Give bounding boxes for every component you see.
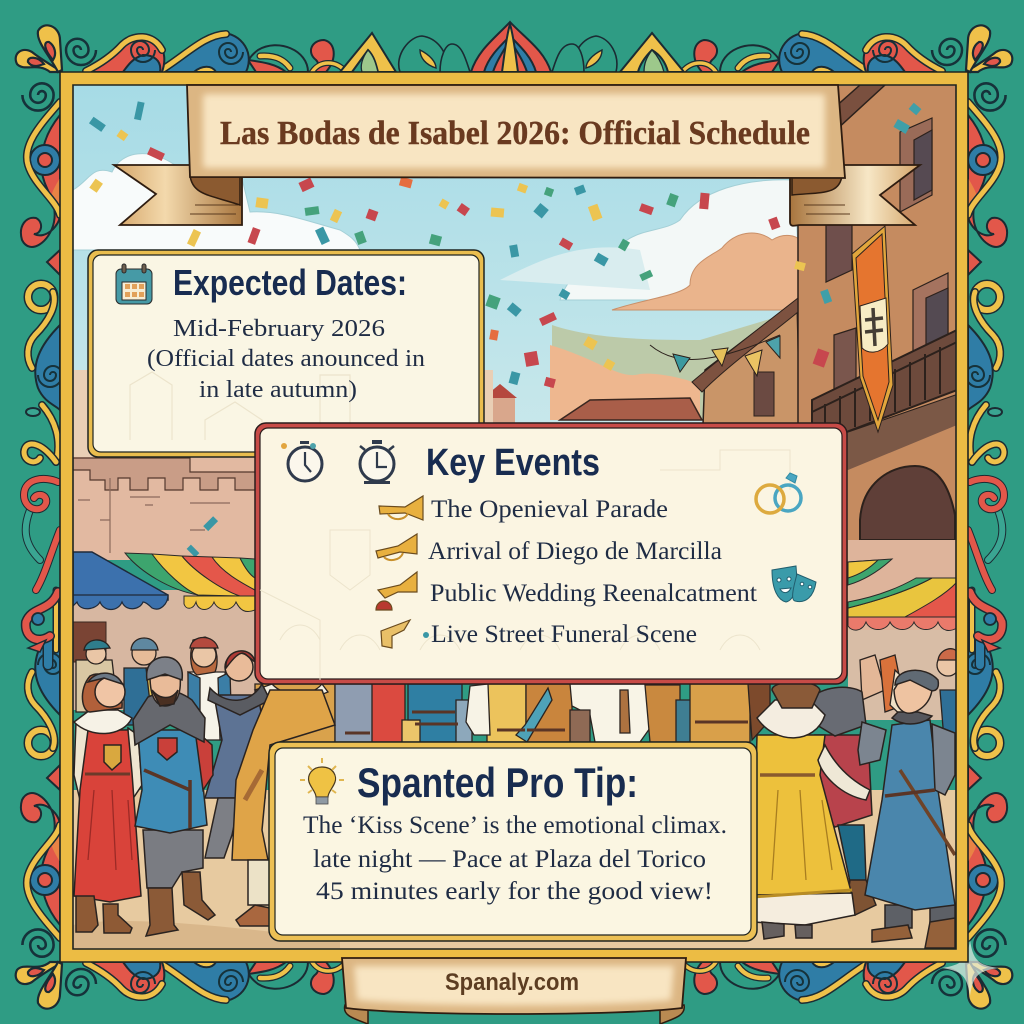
striped tent left [125,553,255,612]
bunting [650,335,780,376]
panel background [88,250,484,457]
arch door [860,466,955,540]
figure: woman in blue dress [858,670,955,948]
teal wall confetti [187,516,218,557]
footer parchment [342,958,686,1014]
lower right wall [848,540,957,640]
text: date details: in late autumn) [199,377,357,403]
panel background [269,742,757,941]
figure: blue-grey man [205,651,270,858]
footer scroll [342,958,686,1024]
sky [73,85,957,505]
heading: key events: Key Events [426,442,600,484]
top centre gem [340,22,684,72]
faint backdrop sketch [260,450,790,680]
stall backdrop [73,590,263,710]
left clouds [73,154,360,250]
icon: trumpet 1 [379,496,423,520]
panel: key events [255,423,847,684]
icon: light bulb [300,758,344,804]
confetti [89,101,921,388]
title scroll [114,85,920,226]
text: event 3: Public Wedding Reenalcatment [430,580,757,607]
left ornament column [21,83,62,957]
parchment banner [187,85,845,178]
title text: Las Bodas de Isabel 2026: Official Schedule [220,115,810,152]
panel: expected dates [88,250,484,457]
panel background [255,423,847,684]
windows [826,118,948,408]
blue tent [73,552,168,600]
left pale town [73,370,493,465]
footer tails [344,1005,684,1024]
icon: stopwatch [360,440,394,484]
sparkle [942,940,998,996]
icon: trumpet 2 [376,534,417,560]
text: date details [147,316,425,403]
event list [376,496,757,648]
text: date details: (Official dates anounced in [147,346,425,372]
figure: woman in yellow dress [753,682,870,939]
icon: calendar [116,264,152,304]
hanging banner [852,226,893,432]
icon: trumpet with bell [376,572,417,610]
faint town sketch [130,372,350,440]
ribbon hatching [190,205,850,214]
background crowd right [860,649,959,740]
left ribbon tail [114,165,242,225]
background crowd left [76,637,232,740]
text: event 4: Live Street Funeral Scene [431,621,697,648]
right ribbon tail [790,165,920,226]
small tower [485,384,515,424]
text: event 2: Arrival of Diego de Marcilla [428,538,722,565]
figure: ochre robe [232,690,335,926]
scroll fold shading [190,175,842,205]
right striped tent [848,559,957,630]
scene illustration [73,85,959,949]
red roof [560,398,702,420]
figure: knight in blue [133,657,215,936]
text: event 1: The Openieval Parade [431,496,668,523]
ground [73,790,957,949]
icon: theatre masks [772,566,816,602]
heading: pro tip: Spanted Pro Tip: [357,759,638,806]
heading: expected dates: Expected Dates: [173,262,407,303]
right clouds [560,180,800,300]
text: tip line 2: late night — Pace at Plaza del Torico [313,846,706,873]
gold picture frame [60,72,968,962]
mid buildings [552,310,800,420]
middle building [703,300,800,425]
peach cloud [612,233,800,310]
text: date details: Mid-February 2026 [173,316,385,342]
icon: teal bullet [423,632,429,638]
icon: clock [281,441,322,481]
text: tip line 1: The ʻKiss Scene’ is the emotional climax. [303,812,727,839]
footer text: Spanaly.com [445,969,579,996]
right big building [798,85,957,640]
right ornament column [966,83,1007,957]
figure: woman in red [74,673,142,933]
icon: wedding rings [756,473,801,513]
castle wall [73,457,256,560]
icon: megaphone [381,620,410,648]
figure: red robe person [810,687,876,915]
text: tip line 3: 45 minutes early for the good view! [316,878,713,905]
panel: pro tip [269,742,757,941]
balcony [812,330,957,445]
background crowd band [255,684,770,742]
